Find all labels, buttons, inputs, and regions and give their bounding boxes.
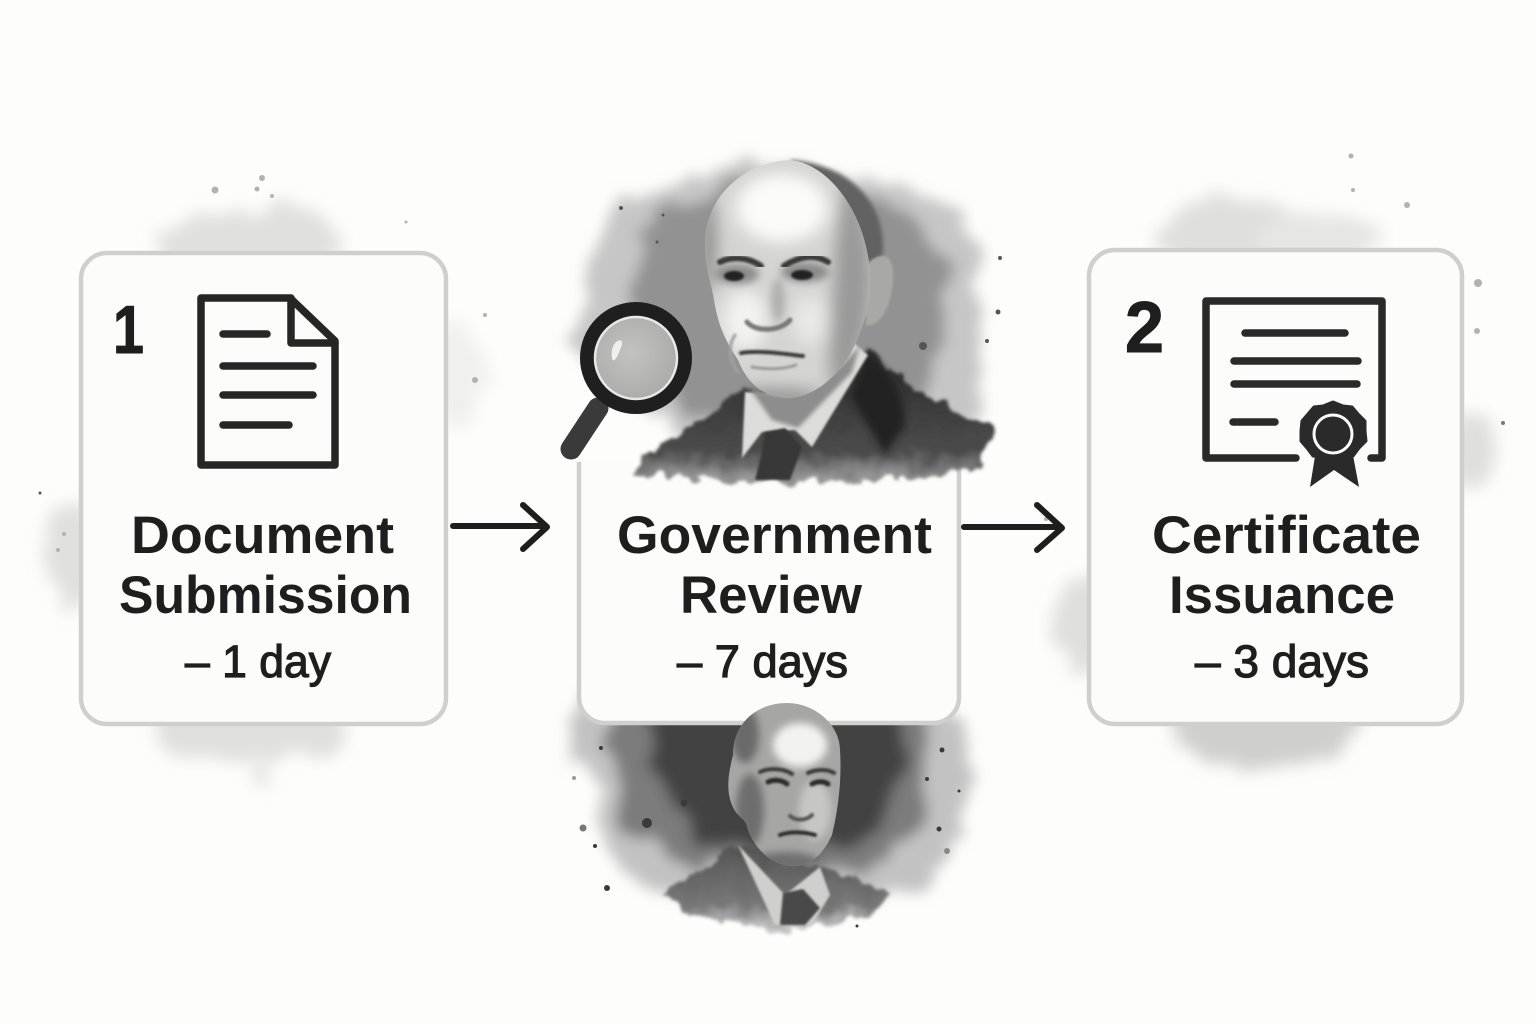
handle [571,408,598,449]
heading: certificate issuance [1152,506,1421,687]
ink wash behind portrait [577,165,985,448]
shirt collar [742,340,868,458]
heading: government review: Government [617,506,932,565]
certificate frame and text lines [1206,301,1382,458]
card 2: government review [579,462,959,723]
heading: government review [617,506,932,687]
watercolour washes behind card 3 [1057,197,1492,768]
step number 1: 1 [113,292,144,368]
icon: magnifying glass [571,309,685,449]
ink wash behind lower portrait [562,700,970,900]
seal [1301,402,1366,461]
head [728,703,841,866]
suit [632,348,992,482]
ribbon [1310,450,1359,487]
heading: document submission: Submission [119,566,412,625]
rim [587,309,685,407]
arrow: step 2 to step 3 [964,505,1062,550]
tie [755,428,802,480]
glint [612,340,622,360]
icon: document [201,298,335,465]
neck shadow [745,345,860,428]
brows, eyes, nose and mouth [760,769,834,835]
card 1: document submission [81,253,446,724]
heading: certificate issuance: Certificate [1152,506,1421,565]
shirt collar [738,845,830,925]
heading: certificate issuance: Issuance [1169,566,1395,625]
suit shadow [850,352,905,455]
tie [780,889,820,925]
lens edge [595,317,677,399]
suit [660,845,892,930]
hair side [790,160,883,305]
heading: document submission: Document [131,506,394,565]
paint speckles [38,154,1505,552]
step number 2: 2 [1125,288,1164,368]
portrait: reviewing official with magnifier [571,160,1002,482]
seal ring [1314,415,1352,453]
card 3: certificate issuance [1089,250,1462,724]
eyebrows [720,257,828,266]
eyes [724,270,813,281]
heading: government review: – 7 days [677,636,848,687]
ear [866,256,893,325]
nose and mouth [730,320,803,372]
heading: certificate issuance: – 3 days [1195,636,1369,687]
arrow: step 1 to step 2 [453,505,547,549]
head [705,160,870,398]
watercolour washes behind card 1 [45,206,483,783]
face shading [731,707,831,872]
face shading [700,174,873,408]
portrait: second official [572,703,960,930]
heading: document submission [119,506,412,687]
icon: certificate [1206,301,1382,487]
speckles [572,746,960,928]
heading: document submission: – 1 day [185,636,331,687]
speckles [619,206,1002,350]
heading: government review: Review [680,566,863,625]
